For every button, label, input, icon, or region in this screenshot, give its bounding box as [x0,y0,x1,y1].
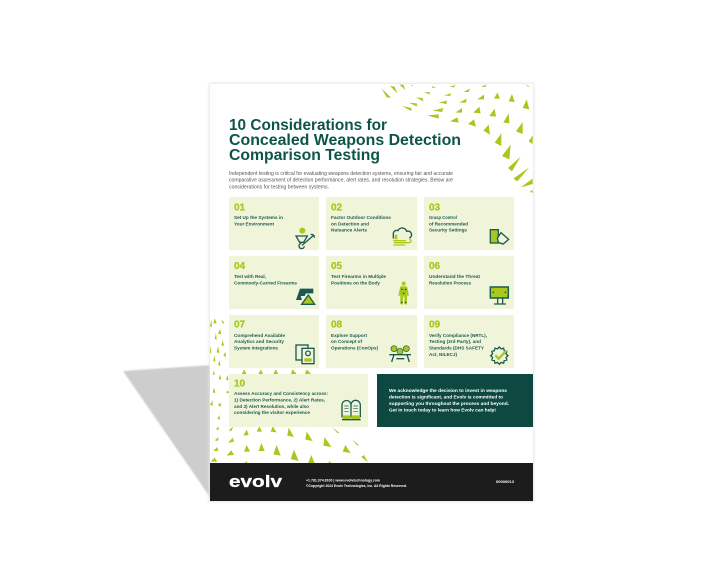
card 08: on Concept of [331,339,362,345]
card 06: Resolution Process [429,280,471,286]
card 02: Nuisance Alerts [331,228,367,234]
card 01 [229,197,319,250]
card 04: Commonly-Carried Firearms [234,280,297,286]
icon: monitor [490,287,508,304]
card 03: of Recommended [429,221,468,227]
card 02: 02 [331,202,343,214]
card 05: Test Firearms in Multiple [331,274,386,280]
card 09: 09 [429,320,441,330]
card 01: Set Up the Systems in [234,215,283,221]
card 10: 10 [234,378,246,390]
card 10: considering the visitor experience [234,410,310,416]
icon: check badge [491,347,508,364]
icon: open book [342,400,361,420]
cast shadow [123,365,212,500]
icon: three people at table [389,346,411,362]
icon: hand on keypad [490,230,509,244]
card 05 [326,256,417,309]
card 10: 1) Detection Performance, 2) Alert Rates, [234,398,326,404]
icon: firearm and warning triangle [296,289,315,304]
card 07: Comprehend Available [234,333,285,339]
card 09: Testing (3rd Party), and [429,339,481,345]
bottom left triangle pattern [211,426,368,464]
footer bar [210,463,533,501]
callout panel: We acknowledge the decision to invest in weapons [389,388,507,394]
icon: cloud and wind [393,228,412,245]
card 04: Test with Real, [234,274,267,280]
card 10: Assess Accuracy and Consistency across: [234,391,328,397]
top right triangle pattern [382,85,533,193]
card 08 [326,315,417,368]
card 10 [229,374,368,427]
icon: person with wrench [296,228,314,249]
card 07: System Integrations [234,345,278,351]
card 07: 07 [234,320,246,330]
intro text: Independent testing is critical for evaluating weapons detection systems, ensuring fair and accurate [229,171,453,177]
triangles between card rows [242,369,311,374]
document code: 00000013 [496,480,514,484]
callout panel: detection is significant, and Evolv is committed to [389,394,503,400]
card 04: 04 [234,261,246,272]
card 08: Operations (ConOps) [331,345,378,351]
card 09: Standards (DHS SAFETY [429,345,485,351]
callout panel: supporting you throughout the process and beyond. [389,401,510,407]
card 08: Explore Support [331,333,367,339]
card 03: Grasp Control [429,215,458,221]
contact and copyright: ©Copyright 2024 Evolv Technologies, Inc. All Rights Reserved. [306,484,407,488]
left edge triangle pattern [210,318,229,420]
card 03: 03 [429,202,441,214]
card 04 [229,256,319,309]
title: Comparison Testing [229,147,380,164]
card 02 [326,197,417,250]
intro text: considerations for testing between systems. [229,184,329,190]
card 09: Verify Compliance (NRTL), [429,333,488,339]
card 07 [229,315,319,368]
card 01: Your Environment [234,222,274,228]
card 09: Act, NILECJ) [429,352,457,358]
card 05: Positions on the Body [331,280,380,286]
intro text: comparative assessment of detection performance, alert rates, and resolution strategies. Below are [229,178,453,184]
card 05: 05 [331,261,343,272]
card 02: on Detection and [331,221,369,227]
callout panel [377,374,533,427]
logo: evolv [229,472,283,491]
card 08: 08 [331,320,343,330]
title: Concealed Weapons Detection [229,132,461,149]
card 10: and 3) Alert Resolution, while also [234,404,309,410]
icon: documents [296,345,314,364]
card 06: 06 [429,261,441,272]
title: 10 Considerations for [229,117,387,134]
icon: body figure [398,282,409,304]
card 06 [424,256,514,309]
card 03 [424,197,514,250]
document page [209,83,534,502]
card 06: Understand the Threat [429,274,480,280]
card 03: Security Settings [429,228,467,234]
card 07: Analytics and Security [234,339,284,345]
card 01: 01 [234,202,246,214]
card 09 [424,315,514,368]
callout panel: Get in touch today to learn how Evolv can help! [389,408,496,414]
contact and copyright: +1.781.374.8100 | www.evolvtechnology.com [306,478,380,482]
card 02: Factor Outdoor Conditions [331,215,391,221]
